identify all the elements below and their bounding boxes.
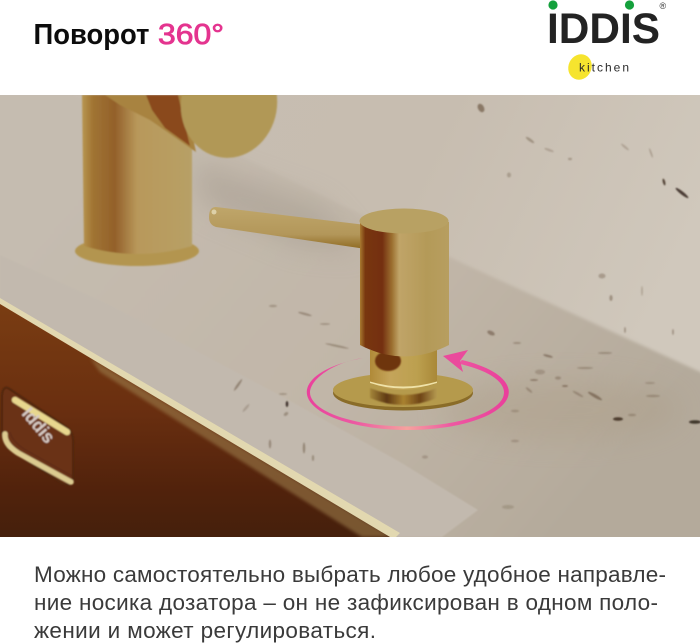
faucet handle highlight	[146, 95, 190, 146]
stone wall	[0, 95, 700, 374]
brass neck	[370, 350, 437, 390]
title: 360°	[158, 19, 224, 51]
description text: жении и может регулироваться.	[34, 618, 376, 643]
registered mark: ®	[660, 1, 666, 11]
description text: Можно самостоятельно выбрать любое удобное направле-	[34, 562, 666, 587]
soft shadow behind faucet	[200, 170, 331, 246]
arrow head	[443, 350, 468, 372]
sink rim shadow	[90, 358, 392, 537]
logo subline: kitchen	[579, 60, 629, 74]
brass base plate	[333, 373, 473, 410]
faucet in background	[74, 95, 278, 267]
description text	[34, 562, 666, 643]
title: Поворот	[34, 19, 150, 51]
icon: green dot left	[548, 0, 558, 10]
rotation arrow	[307, 350, 509, 430]
cylinder body	[360, 222, 449, 356]
sink basin	[0, 303, 392, 537]
logo: IDDIS kitchen	[547, 0, 666, 84]
stone pores	[233, 103, 700, 509]
sink gold rim	[0, 298, 400, 537]
dispenser spout	[209, 207, 366, 249]
faucet body	[82, 95, 192, 254]
ring	[307, 358, 509, 430]
sink badge: Iddis	[18, 403, 59, 447]
cylinder top	[360, 208, 448, 234]
warm stain on counter	[461, 390, 638, 429]
dispenser body	[333, 208, 473, 410]
sink badge	[2, 388, 73, 485]
faucet handle connector	[105, 95, 196, 152]
icon: yellow blob	[564, 50, 596, 84]
photo: dispenser on stone countertop	[0, 95, 700, 537]
faucet base flange	[74, 242, 200, 267]
faucet handle disc	[180, 95, 278, 159]
title	[34, 19, 224, 51]
description text: ние носика дозатора – он не зафиксирован в одном поло-	[34, 590, 658, 615]
icon: green dot right	[625, 0, 634, 10]
icon: logo wordmark: IDDIS	[547, 5, 660, 53]
countertop surface	[288, 258, 700, 537]
stone front bevel	[316, 438, 477, 537]
